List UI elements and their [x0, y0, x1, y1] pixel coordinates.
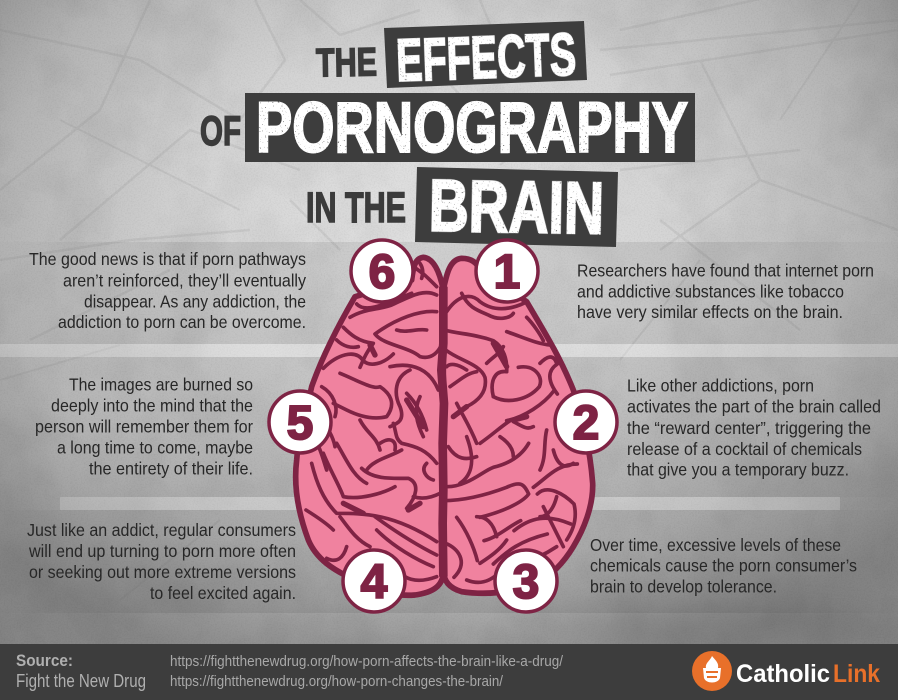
number circle 6: 6 [369, 246, 395, 299]
text block 5: The images are burned so [69, 374, 253, 394]
text block 3 [590, 535, 857, 596]
text block 3: brain to develop tolerance. [590, 576, 777, 596]
folds [306, 263, 577, 582]
text block 6: The good news is that if porn pathways [29, 249, 306, 269]
brain illustration [296, 257, 593, 595]
text block 1: Researchers have found that internet porn [577, 260, 874, 280]
number circle 3: 3 [513, 556, 539, 609]
title box: PORNOGRAPHY: PORNOGRAPHY [256, 89, 688, 168]
footer bar [0, 644, 898, 700]
central fissure [441, 287, 444, 577]
text block 4: to feel excited again. [150, 583, 296, 603]
text block 6 [29, 249, 306, 332]
text block 1: and addictive substances like tobacco [577, 282, 844, 302]
text block 2: release of a cocktail of chemicals [627, 439, 862, 459]
logo: flame icon [692, 651, 732, 691]
text block 4: will end up turning to porn more often [28, 541, 296, 561]
number circle 1: 1 [494, 246, 520, 299]
text block 5: deeply into the mind that the [51, 396, 253, 416]
title [200, 21, 695, 250]
text block 4: or seeking out more extreme versions [29, 562, 296, 582]
number circle 3 [495, 550, 557, 612]
source url 1: https://fightthenewdrug.org/how-porn-affects-the-brain-like-a-drug/ [170, 653, 564, 670]
number circle 6 [351, 240, 413, 302]
text block 2: Like other addictions, porn [627, 376, 814, 396]
text block 5: the entirety of their life. [89, 458, 253, 478]
number circle 2 [555, 391, 617, 453]
text block 5 [35, 374, 253, 478]
text block 5: a long time to come, maybe [57, 438, 253, 458]
number circle 2: 2 [573, 397, 599, 450]
text block 6: addiction to porn can be overcome. [58, 312, 306, 332]
logo wordmark: Link [833, 660, 880, 688]
text block 2: that give you a temporary buzz. [627, 460, 849, 480]
title box: BRAIN: BRAIN [428, 166, 605, 250]
text block 2: the “reward center”, triggering the [627, 418, 871, 438]
title box: EFFECTS [384, 21, 587, 94]
source url 2: https://fightthenewdrug.org/how-porn-changes-the-brain/ [170, 673, 504, 690]
text block 4: Just like an addict, regular consumers [27, 520, 296, 540]
number circle 4 [343, 550, 405, 612]
source name: Fight the New Drug [16, 671, 146, 691]
text block 3: chemicals cause the porn consumer’s [590, 556, 857, 576]
text block 3: Over time, excessive levels of these [590, 535, 841, 555]
text block 1: have very similar effects on the brain. [577, 302, 843, 322]
source label: Source: [16, 651, 73, 670]
text block 2 [627, 376, 881, 480]
logo wordmark: Catholic [736, 660, 830, 688]
horizontal bands [0, 242, 898, 613]
text block 5: person will remember them for [35, 416, 253, 436]
text block 1 [577, 260, 874, 322]
text block 6: aren’t reinforced, they’ll eventually [63, 270, 306, 290]
title words: IN THE: IN THE [306, 184, 406, 232]
text block 6: disappear. As any addiction, the [84, 292, 306, 312]
number circle 1 [476, 240, 538, 302]
title box: EFFECTS: EFFECTS [395, 21, 577, 94]
title word: OF: OF [200, 107, 241, 154]
left hemisphere outline [296, 257, 443, 595]
number circle 5: 5 [287, 397, 313, 450]
number circle 4: 4 [361, 556, 388, 609]
title word: THE: THE [316, 40, 377, 86]
text block 4 [27, 520, 296, 603]
number circle 5 [269, 391, 331, 453]
text block 2: activates the part of the brain called [627, 396, 881, 416]
right hemisphere outline [443, 258, 593, 593]
